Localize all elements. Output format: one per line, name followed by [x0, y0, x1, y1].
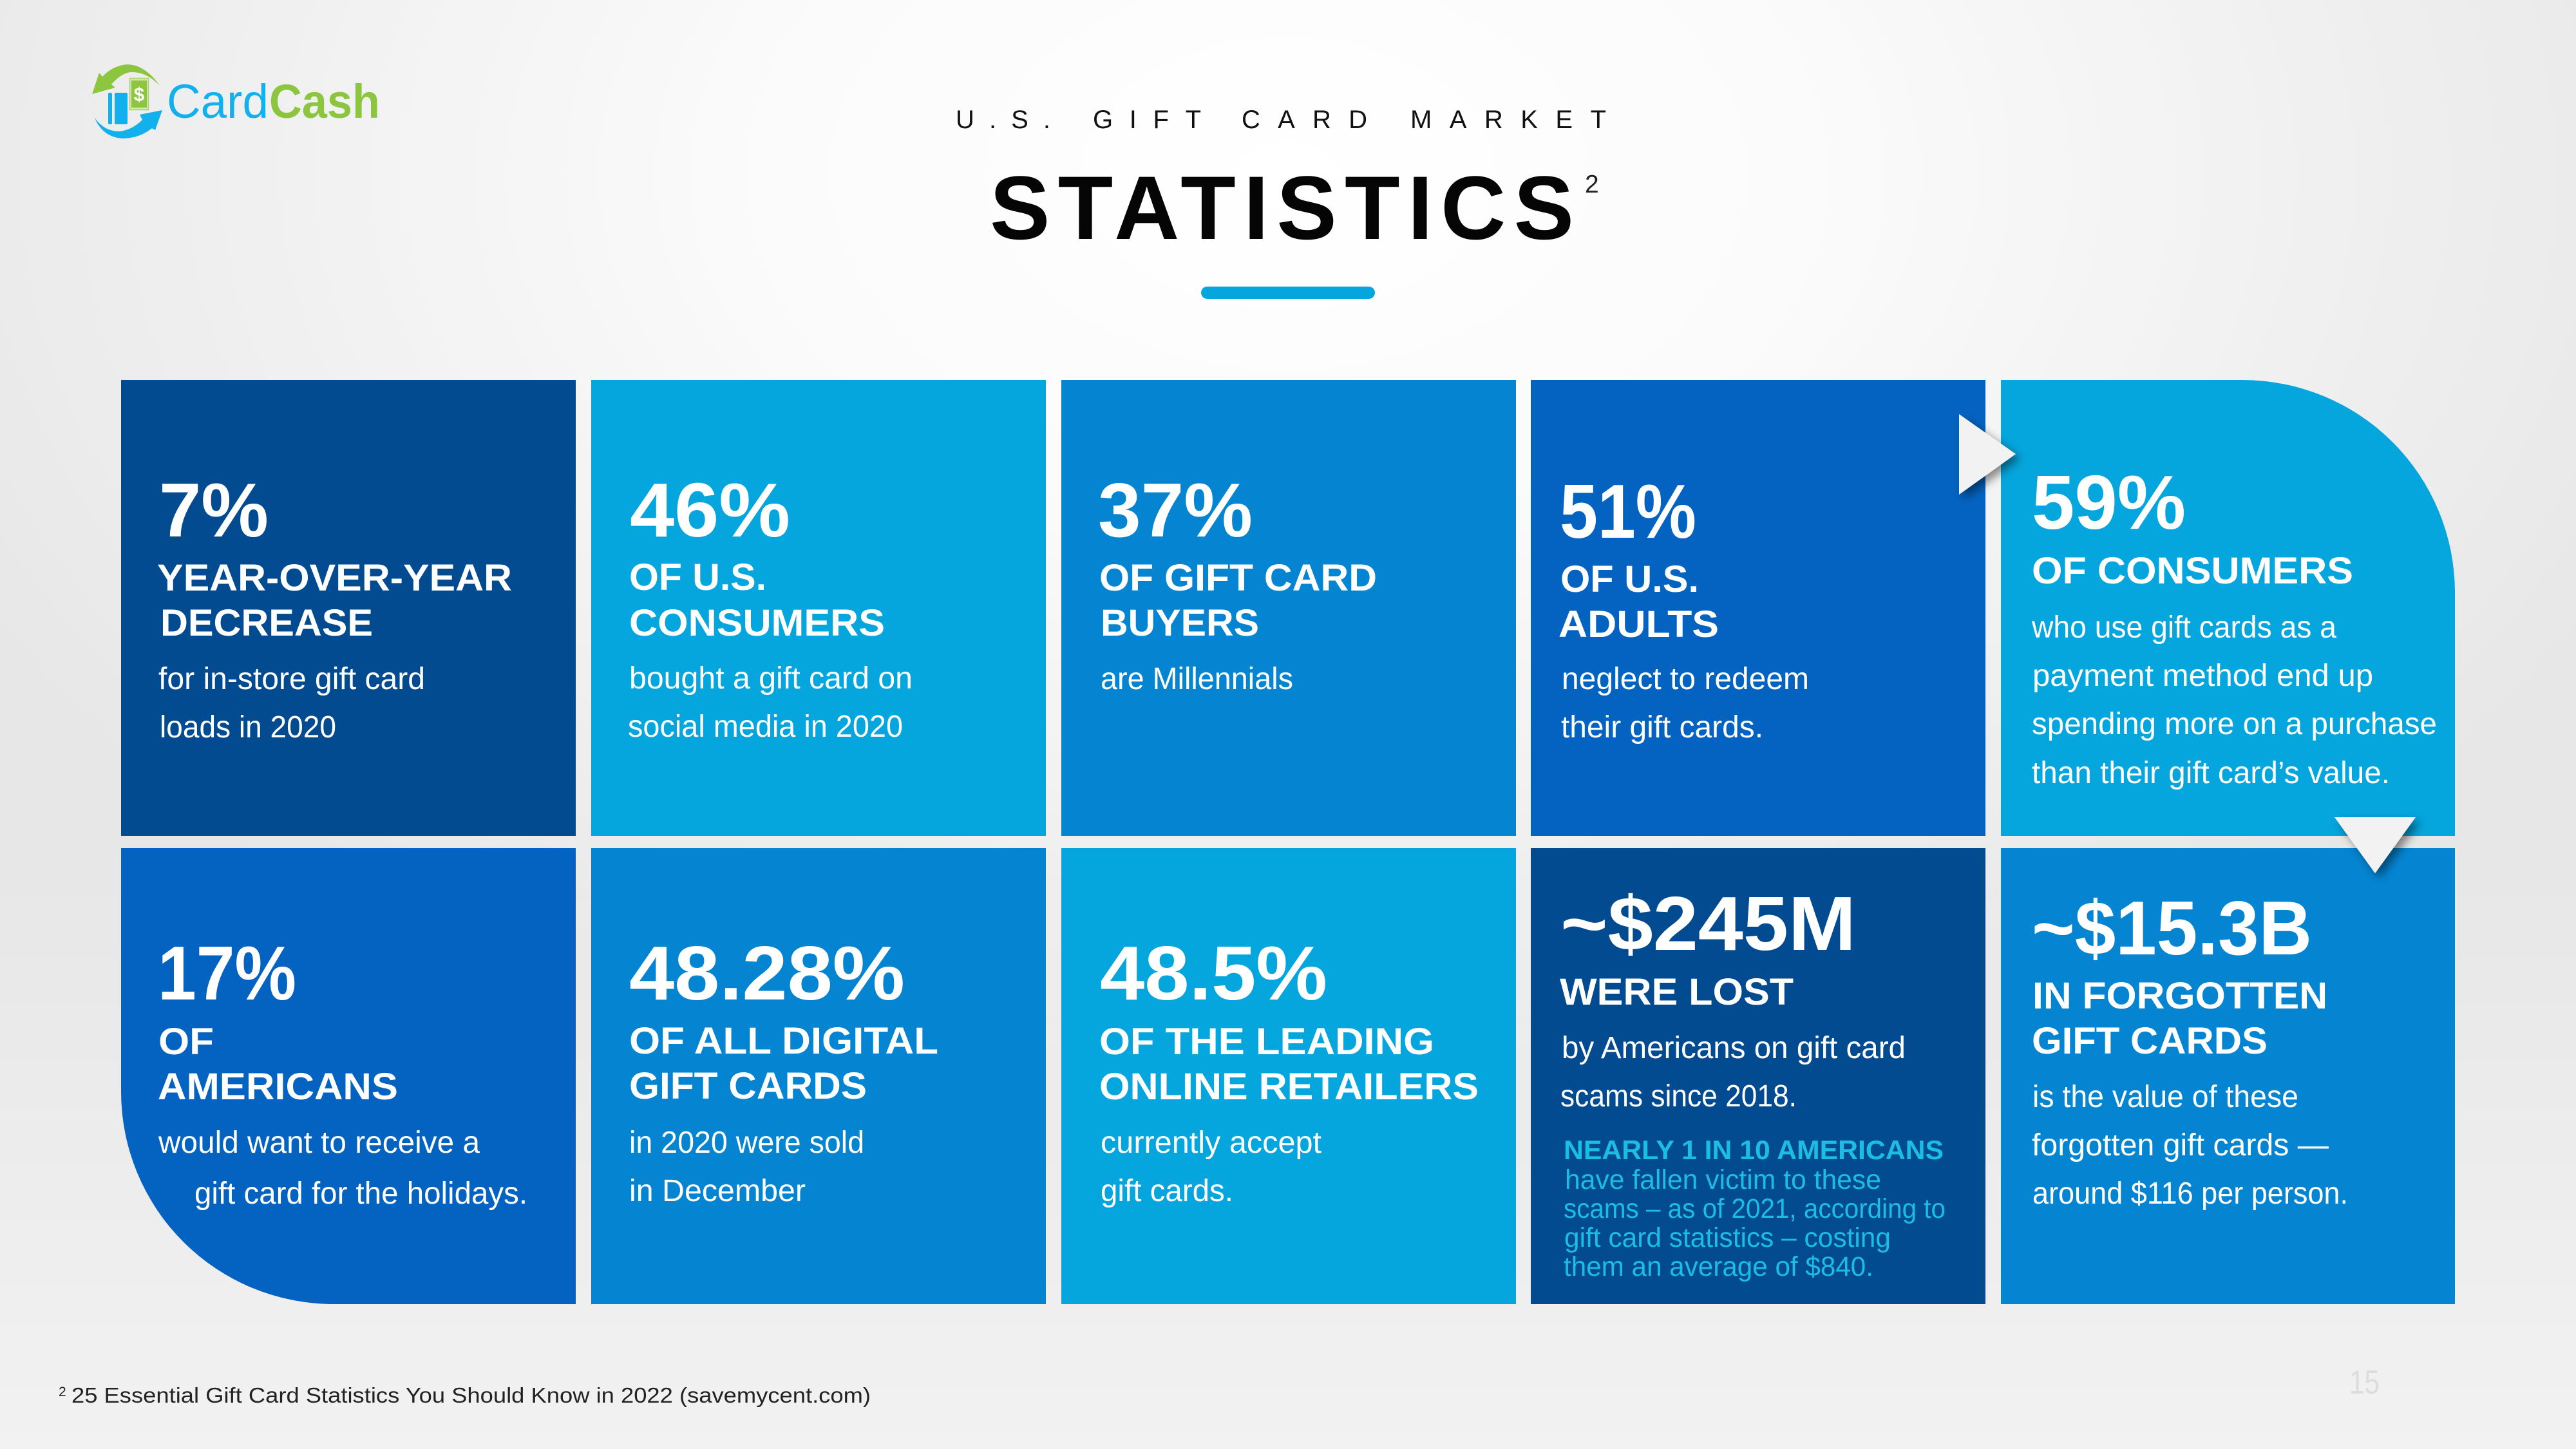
- stat: 48.5%: [1100, 931, 1327, 1016]
- icon: blue arrow: [95, 110, 162, 138]
- panel: 7%: [121, 380, 576, 836]
- icon: green arrow: [92, 64, 160, 94]
- callout: nearly 1 in 10: them an average of $840.: [1564, 1251, 1873, 1282]
- panel: 51%: ADULTS: [1558, 603, 1719, 645]
- title underline: [1201, 287, 1375, 299]
- description: would want to receive a: [158, 1126, 480, 1160]
- callout: nearly 1 in 10: have fallen victim to these: [1565, 1164, 1881, 1195]
- description: bought a gift card on: [629, 661, 913, 696]
- stat: ~$245M: [1560, 881, 1856, 967]
- description: neglect to redeem: [1562, 662, 1809, 696]
- panel: 37%: BUYERS: [1101, 602, 1259, 644]
- arrow: down-pointing triangle: [2334, 817, 2416, 873]
- panel: 59%: [2001, 380, 2455, 836]
- heading: OF CONSUMERS: [2032, 550, 2353, 592]
- description: in 2020 were sold: [629, 1126, 864, 1160]
- panel: 51%: their gift cards.: [1561, 710, 1763, 744]
- panel: 51%: [1531, 380, 1985, 836]
- footnote: 25 Essential Gift Card Statistics You Should Know in 2022 (savemycent.com): [71, 1383, 871, 1407]
- panel: 17%: gift card for the holidays.: [194, 1177, 527, 1211]
- title: eyebrow: MARKET: [1410, 106, 1606, 134]
- panel: ~$15.3B: [2001, 848, 2455, 1304]
- icon: card: [108, 93, 128, 124]
- heading: OF: [158, 1021, 214, 1063]
- panel: ~$245M: scams since 2018.: [1560, 1079, 1797, 1113]
- title: statistics: STATISTICS: [990, 157, 1574, 258]
- description: for in-store gift card: [158, 662, 425, 696]
- panel: 46%: [591, 380, 1046, 836]
- panel: 48.28%: [591, 848, 1046, 1304]
- title: eyebrow: [956, 106, 1606, 134]
- callout: nearly 1 in 10: [1564, 1135, 1946, 1282]
- panel: 59%: spending more on a purchase: [2032, 707, 2437, 741]
- stat: 7%: [159, 468, 269, 553]
- stat: 46%: [630, 468, 790, 553]
- description: is the value of these: [2032, 1080, 2298, 1114]
- stat: 37%: [1098, 468, 1253, 553]
- panel: ~$245M: [1531, 848, 1985, 1304]
- panel: 48.5%: gift cards.: [1101, 1174, 1233, 1208]
- heading: WERE LOST: [1560, 971, 1794, 1013]
- heading: OF ALL DIGITAL: [629, 1020, 938, 1062]
- stat: 48.28%: [629, 931, 905, 1016]
- icon: dollar bill: $: [134, 84, 145, 106]
- callout: nearly 1 in 10: scams – as of 2021, according to: [1564, 1193, 1946, 1224]
- logo: CardCash: [92, 64, 380, 138]
- panel: 59%: than their gift card’s value.: [2032, 756, 2390, 790]
- panel: 7%: loads in 2020: [160, 710, 336, 744]
- title: eyebrow: U.S.: [956, 106, 1050, 134]
- logo wordmark: Cash: [269, 75, 380, 128]
- stat: 59%: [2032, 460, 2186, 545]
- description: by Americans on gift card: [1562, 1031, 1906, 1065]
- logo wordmark: [167, 75, 380, 128]
- title: eyebrow: GIFT: [1093, 106, 1201, 134]
- description: who use gift cards as a: [2031, 611, 2336, 645]
- callout: nearly 1 in 10: NEARLY 1 IN 10 AMERICANS: [1564, 1135, 1944, 1165]
- heading: OF U.S.: [1560, 558, 1699, 600]
- panel: 7%: DECREASE: [160, 602, 373, 644]
- stat: 51%: [1560, 469, 1696, 554]
- panel: 37%: [1061, 380, 1516, 836]
- footnote: 2: [59, 1385, 66, 1399]
- description: are Millennials: [1101, 662, 1293, 696]
- callout: nearly 1 in 10: gift card statistics – costing: [1564, 1222, 1891, 1253]
- panel: 46%: CONSUMERS: [629, 602, 885, 644]
- description: currently accept: [1101, 1126, 1321, 1160]
- panel: 46%: social media in 2020: [628, 710, 903, 744]
- stat: ~$15.3B: [2032, 886, 2312, 971]
- title: eyebrow: CARD: [1242, 106, 1367, 134]
- arrow: right-pointing triangle: [1959, 414, 2016, 495]
- heading: OF THE LEADING: [1099, 1021, 1434, 1063]
- heading: YEAR-OVER-YEAR: [157, 557, 512, 599]
- logo wordmark: Card: [167, 75, 269, 128]
- panel: 48.28%: GIFT CARDS: [629, 1065, 867, 1107]
- heading: IN FORGOTTEN: [2032, 975, 2327, 1017]
- panel: 48.5%: [1061, 848, 1516, 1304]
- title footnote mark: 2: [1585, 171, 1599, 198]
- panel: 59%: payment method end up: [2032, 659, 2373, 693]
- panel: 48.5%: ONLINE RETAILERS: [1099, 1066, 1479, 1108]
- stat: 17%: [158, 931, 296, 1016]
- heading: OF U.S.: [629, 556, 766, 598]
- icon: dollar bill: [130, 79, 148, 109]
- panel: ~$15.3B: around $116 per person.: [2032, 1177, 2348, 1211]
- panel: ~$15.3B: forgotten gift cards —: [2032, 1128, 2329, 1162]
- panel: 17%: [121, 848, 576, 1304]
- panel: ~$15.3B: GIFT CARDS: [2032, 1020, 2268, 1062]
- page number: 15: [2349, 1364, 2380, 1401]
- panel: 17%: AMERICANS: [158, 1066, 398, 1108]
- panel: 48.28%: in December: [629, 1174, 806, 1208]
- heading: OF GIFT CARD: [1099, 557, 1377, 599]
